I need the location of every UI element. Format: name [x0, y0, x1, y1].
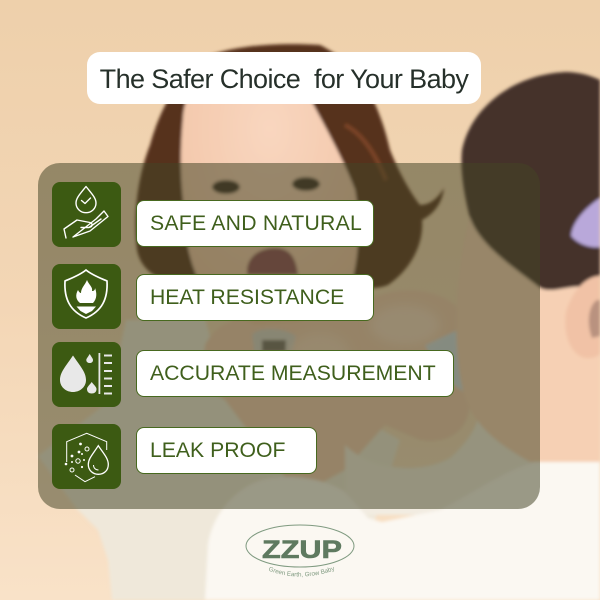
cup [252, 329, 296, 352]
right child hair [461, 72, 600, 290]
label: heat resistance: HEAT RESISTANCE [150, 286, 344, 309]
icon: hand holding water drop [52, 182, 121, 247]
far sleeve [345, 412, 548, 515]
title pill: The Safer Choice for Your Baby [100, 64, 468, 94]
main sweater [205, 462, 600, 600]
label: leak proof: LEAK PROOF [150, 439, 285, 462]
label: safe and natural: SAFE AND NATURAL [150, 212, 362, 235]
logo: ZZUP: ZZUP [262, 536, 342, 564]
label: accurate measurement: ACCURATE MEASUREMENT [150, 362, 436, 385]
label: safe and natural [136, 200, 374, 247]
left child face [181, 62, 358, 329]
hands and arm [200, 290, 470, 495]
logo: ZZUP [246, 524, 354, 578]
translucent panel [38, 163, 540, 509]
left child hair [135, 44, 444, 290]
mouth [247, 248, 298, 275]
logo: ZZUP: Green Earth, Grow Baby [269, 566, 334, 578]
title pill [87, 52, 481, 104]
label: heat resistance [136, 274, 374, 321]
right child skin [456, 215, 600, 462]
label: leak proof [136, 427, 317, 474]
label: accurate measurement [136, 350, 454, 397]
hair clip [571, 198, 600, 247]
icon: drops with measuring scale [52, 342, 121, 407]
ear [565, 276, 600, 358]
left child body [38, 318, 400, 600]
icon: shield with flame [52, 264, 121, 329]
bottle [425, 330, 464, 392]
icon: shield with particles and drop [52, 424, 121, 489]
eyes [212, 180, 240, 194]
